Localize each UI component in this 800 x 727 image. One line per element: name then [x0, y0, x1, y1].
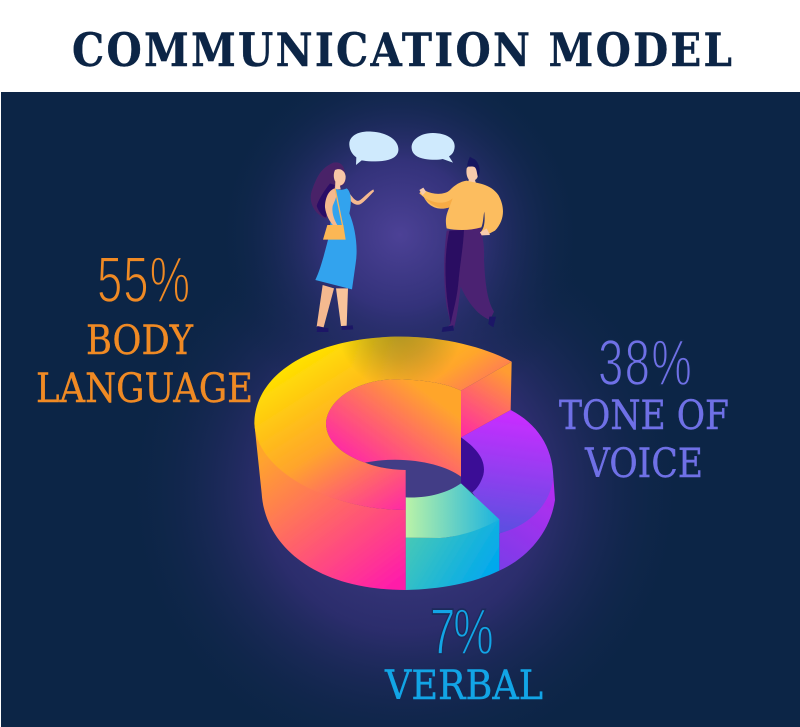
segment: tone of voice top: [461, 410, 553, 533]
segment: body language top: [254, 337, 512, 510]
shaded rim of top face: [340, 336, 456, 380]
38 percent: 38%: [598, 326, 692, 399]
speech bubble right: [412, 133, 455, 163]
title: COMMUNICATION MODEL: [72, 24, 732, 78]
segment: body language inner wall: [326, 379, 461, 477]
man: [419, 157, 503, 332]
woman: [311, 162, 374, 332]
55 percent: 55%: [97, 243, 190, 316]
donut hole: [365, 457, 461, 497]
speech bubble left: [349, 132, 398, 165]
segment: body language cut wall: [461, 362, 512, 437]
tone of text: TONE OF: [559, 393, 729, 439]
segment: tone of voice side: [499, 477, 555, 571]
verbal text: VERBAL: [384, 663, 543, 709]
7 percent: 7%: [430, 595, 494, 668]
segment: body language side: [254, 423, 406, 590]
body text: BODY: [86, 318, 194, 364]
label: body language: [36, 243, 253, 412]
label: verbal: [384, 595, 543, 709]
3D donut chart: [253, 333, 555, 590]
language text: LANGUAGE: [36, 366, 253, 412]
segment: verbal side: [406, 519, 499, 590]
segment: verbal top: [406, 483, 499, 538]
illustration: two people talking: [311, 132, 503, 332]
label: tone of voice: [559, 326, 729, 487]
voice text: VOICE: [584, 441, 703, 487]
white header band: [0, 0, 800, 92]
segment: tone of voice inner wall: [461, 437, 485, 492]
